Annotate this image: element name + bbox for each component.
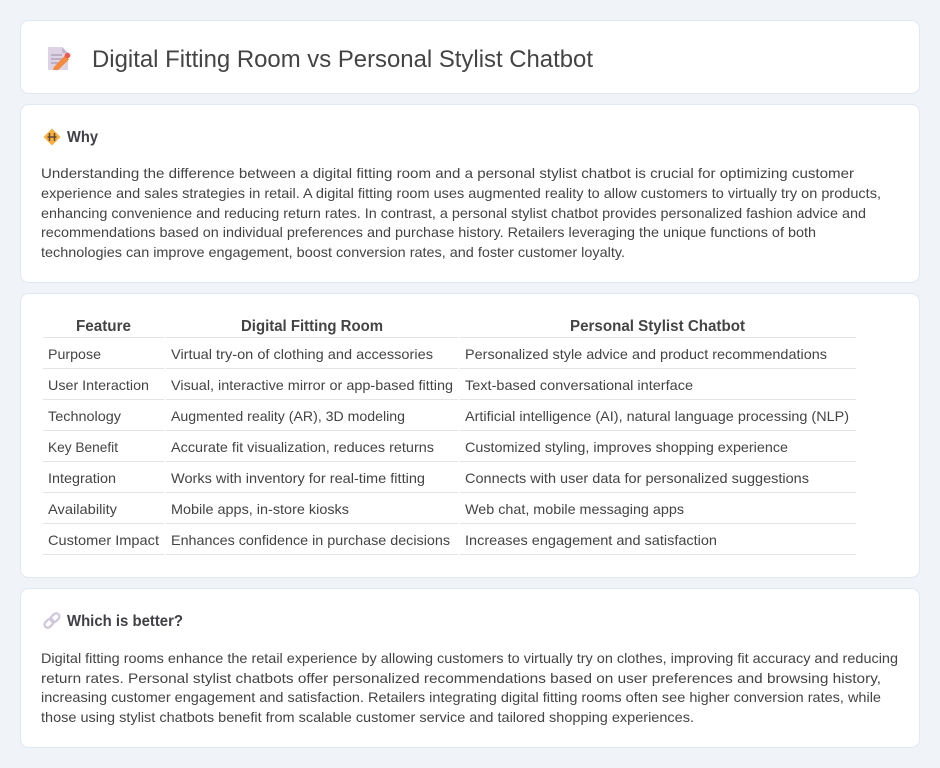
row: user interaction: User Interaction xyxy=(48,377,149,393)
text block: which is better paragraph: Digital fitting rooms enhance the retail experience by allowing customers to virtually try on clothes, improving fit accuracy and reducing xyxy=(41,650,898,666)
row: technology: Augmented reality (AR), 3D modeling xyxy=(171,408,405,424)
text block: why paragraph: recommendations based on individual preferences and purchase history. Retailers leveraging the unique functions of both xyxy=(41,224,816,240)
text block: which is better paragraph: return rates. Personal stylist chatbots offer personalized recommendations based on user preferences and browsing history, xyxy=(41,670,881,686)
row: customer impact xyxy=(48,532,717,548)
row: user interaction: Visual, interactive mirror or app-based fitting xyxy=(171,377,453,393)
row: purpose: Personalized style advice and product recommendations xyxy=(465,346,827,362)
table header: Digital Fitting Room xyxy=(241,318,383,335)
row: technology xyxy=(48,408,849,424)
row: purpose: Virtual try-on of clothing and accessories xyxy=(171,346,433,362)
text block: why paragraph: enhancing convenience and reducing return rates. In contrast, a personal stylist chatbot provides personalized fashion advice and xyxy=(41,205,866,221)
table header: Feature xyxy=(76,318,131,335)
row: key benefit xyxy=(48,439,788,455)
icon: warning diamond xyxy=(44,128,60,146)
row: purpose xyxy=(48,346,827,362)
row: integration xyxy=(48,470,809,486)
row: technology: Technology xyxy=(48,408,121,424)
row: availability xyxy=(48,501,684,517)
row: availability: Availability xyxy=(48,501,117,517)
text block: why paragraph xyxy=(41,165,881,260)
text block: why paragraph: Understanding the difference between a digital fitting room and a personal stylist chatbot is crucial for optimizing customer xyxy=(41,165,854,181)
row: purpose: Purpose xyxy=(48,346,101,362)
text block: which is better paragraph: increasing customer engagement and satisfaction. Retailers integrating digital fitting rooms often see higher conversion rates, while xyxy=(41,689,881,705)
row: integration: Works with inventory for real-time fitting xyxy=(171,470,425,486)
panel: which is better xyxy=(20,588,920,748)
table header: Personal Stylist Chatbot xyxy=(570,318,746,335)
text block: why paragraph: experience and sales strategies in retail. A digital fitting room uses augmented reality to allow customers to virtually try on products, xyxy=(41,185,881,201)
text block: why paragraph: technologies can improve engagement, boost conversion rates, and foster customer loyalty. xyxy=(41,244,625,260)
row: user interaction: Text-based conversational interface xyxy=(465,377,693,393)
row: key benefit: Key Benefit xyxy=(48,439,118,455)
row: key benefit: Accurate fit visualization, reduces returns xyxy=(171,439,434,455)
panel: why xyxy=(20,104,920,282)
icon: memo with pencil xyxy=(48,47,70,70)
row: integration: Connects with user data for personalized suggestions xyxy=(465,470,809,486)
row: customer impact: Enhances confidence in purchase decisions xyxy=(171,532,450,548)
panel: comparison table xyxy=(20,294,920,578)
panel: title card xyxy=(20,20,920,94)
row: integration: Integration xyxy=(48,470,116,486)
row: availability: Web chat, mobile messaging apps xyxy=(465,501,684,517)
text block: which is better paragraph: those using stylist chatbots benefit from scalable customer service and tailored shopping experiences. xyxy=(41,709,694,725)
icon: link xyxy=(43,612,61,629)
text block: which is better paragraph xyxy=(41,650,898,725)
row: customer impact: Increases engagement and satisfaction xyxy=(465,532,717,548)
row: availability: Mobile apps, in-store kiosks xyxy=(171,501,349,517)
row: customer impact: Customer Impact xyxy=(48,532,159,548)
title: Digital Fitting Room vs Personal Stylist Chatbot xyxy=(92,46,593,73)
row: technology: Artificial intelligence (AI), natural language processing (NLP) xyxy=(465,408,849,424)
row: user interaction xyxy=(48,377,693,393)
row: key benefit: Customized styling, improves shopping experience xyxy=(465,439,788,455)
heading: which is better: Which is better? xyxy=(67,613,183,630)
table header xyxy=(76,318,746,335)
heading: why: Why xyxy=(67,129,98,146)
